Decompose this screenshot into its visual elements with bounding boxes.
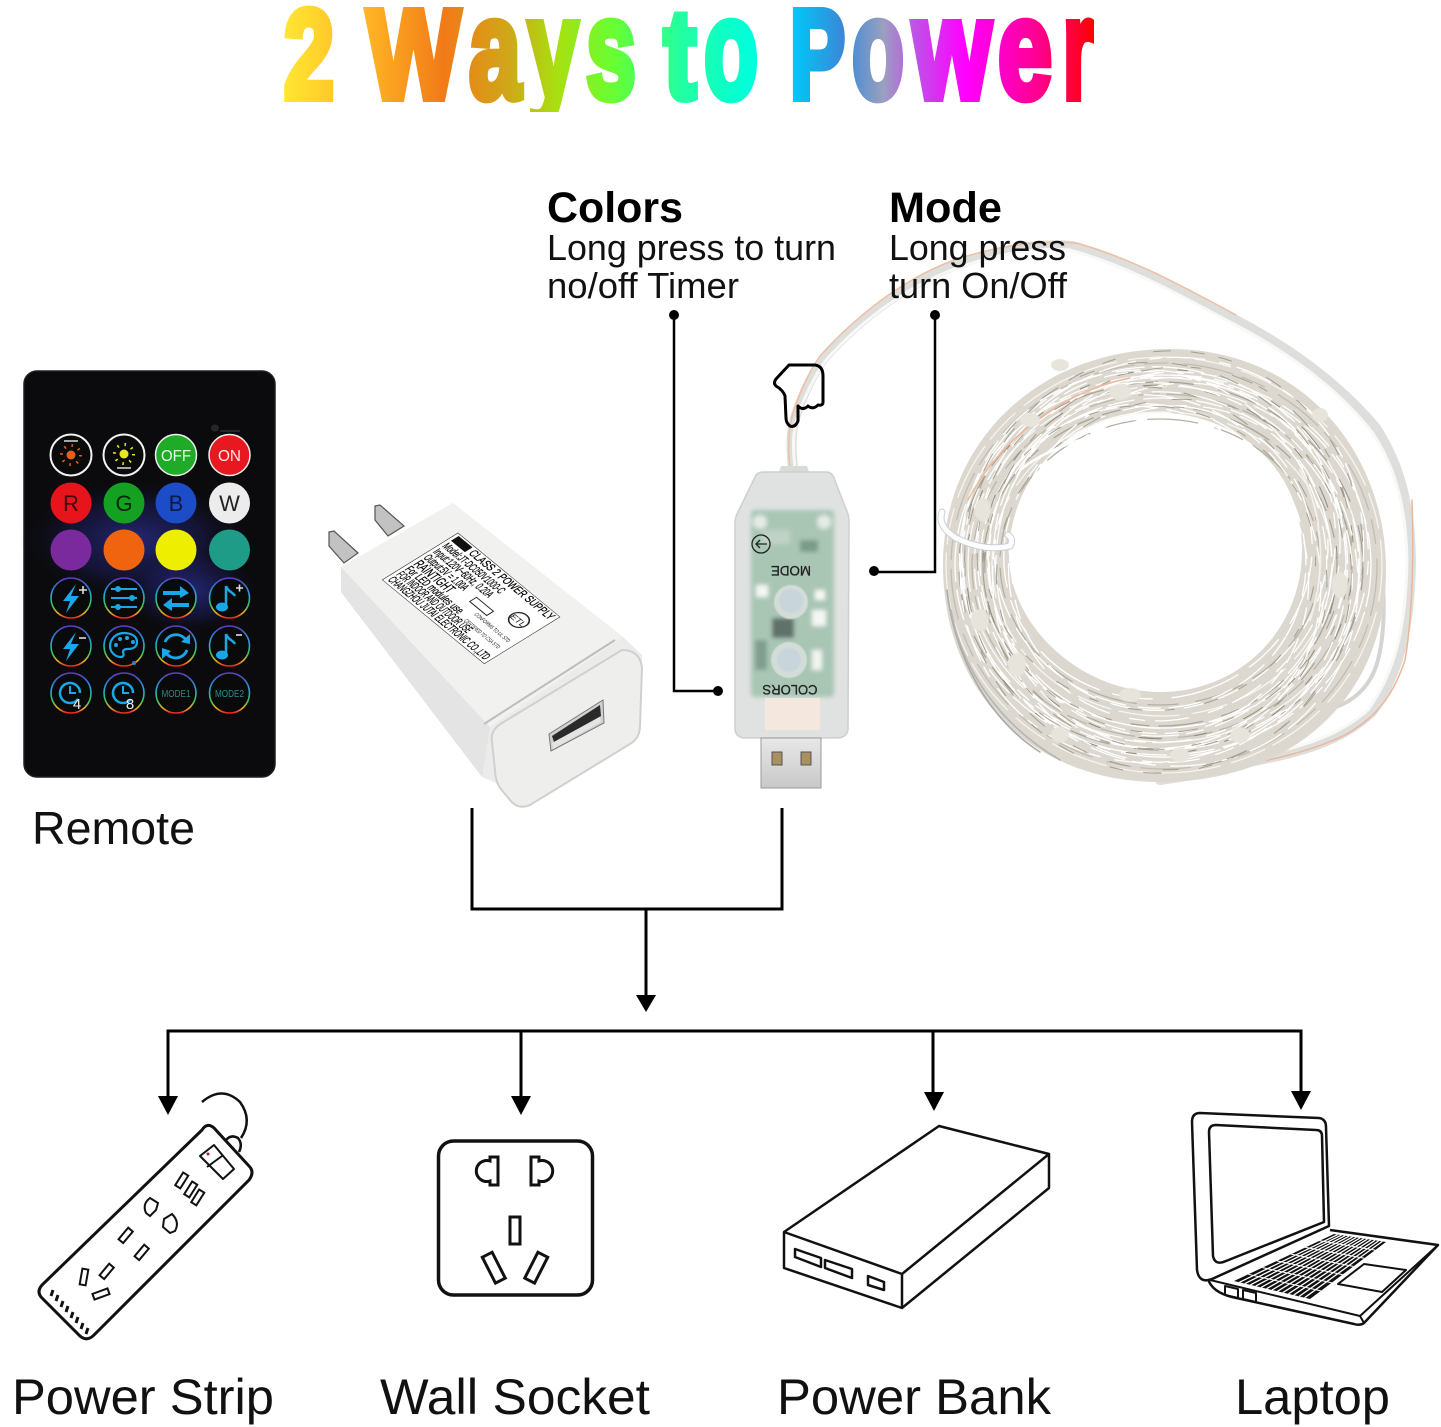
icon: laptop — [1192, 1113, 1438, 1325]
row 6 buttons: MODE1 — [162, 689, 191, 700]
title — [284, 6, 1094, 112]
adapter front face — [492, 650, 642, 807]
adapter label: CHANGZHOU JUTAI ELECTRONIC CO.,LTD — [385, 574, 494, 662]
label: wall socket: Wall Socket — [380, 1368, 650, 1425]
adapter label: Model:JT-DC050V1000-C — [439, 541, 509, 596]
row 2 buttons — [50, 482, 250, 524]
adapter label: CERTIFIED TO CSA STD — [462, 619, 501, 650]
row 1 buttons: ON — [218, 448, 241, 465]
adapter label: ETL — [508, 613, 529, 628]
adapter body — [341, 503, 642, 807]
callout: colors: Colors — [547, 185, 683, 232]
adapter label — [382, 532, 561, 664]
row 1 buttons: OFF — [161, 448, 191, 465]
USB power adapter — [329, 503, 642, 807]
label: power bank: Power Bank — [777, 1368, 1052, 1425]
adapter prongs — [329, 505, 404, 563]
USB controller: COLORS — [762, 682, 818, 698]
label: laptop: Laptop — [1235, 1368, 1390, 1425]
icon: wall socket — [438, 1141, 592, 1295]
callout: mode — [869, 185, 1068, 576]
remote label: Remote — [32, 802, 195, 854]
control buttons — [771, 585, 808, 678]
adapter label: Output:5V = 1.00A — [420, 552, 472, 593]
row 2 buttons: G — [115, 491, 133, 516]
icon: pressing hand — [774, 365, 823, 426]
adapter label: For LED modules use — [402, 564, 468, 616]
connector from adapter and USB — [472, 808, 782, 1012]
icon: power bank — [784, 1126, 1049, 1308]
row 6 buttons — [51, 673, 250, 713]
row 1 buttons — [50, 424, 250, 476]
wire loop from controller around coil — [789, 242, 1413, 780]
distribution lines and arrows — [158, 1031, 1311, 1115]
icon: power strip — [39, 1094, 252, 1339]
callout: mode: Mode — [889, 185, 1002, 232]
adapter label: CONFORMS TO UL STD — [472, 613, 511, 644]
circuit board — [751, 510, 834, 697]
adapter label: RAINTIGHT — [410, 558, 459, 595]
row 4 buttons — [51, 578, 250, 618]
adapter label: Input:120V~60Hz, 0.20A — [430, 546, 497, 600]
row 2 buttons: W — [219, 491, 240, 516]
row 6 buttons: MODE2 — [215, 689, 244, 700]
remote control — [20, 371, 275, 777]
row 5 buttons — [51, 626, 250, 666]
label: power strip: Power Strip — [12, 1368, 274, 1425]
controller neck — [779, 466, 809, 472]
row 2 buttons: B — [169, 491, 183, 516]
USB port — [549, 700, 604, 751]
row 2 buttons: R — [63, 491, 79, 516]
callout: colors: Long press to turn — [547, 227, 836, 268]
circular arrow mark — [752, 535, 770, 553]
USB controller — [735, 466, 849, 788]
row 3 colour buttons — [50, 530, 250, 570]
callout: mode: Long press — [889, 227, 1066, 268]
row 6 buttons: 8 — [126, 696, 134, 713]
keyboard — [1234, 1234, 1386, 1299]
row 6 buttons: 4 — [73, 696, 81, 713]
USB plug — [761, 698, 821, 788]
button labels: MODE — [771, 563, 811, 579]
callout: colors: no/off Timer — [547, 265, 739, 306]
light string coil — [877, 274, 1441, 848]
adapter label: CLASS 2 POWER SUPPLY — [465, 548, 558, 622]
callout: mode: turn On/Off — [889, 265, 1068, 306]
controller body — [735, 472, 849, 738]
adapter label: FOR INDOOR AND OUTDOOR USE — [393, 569, 476, 635]
callout: colors — [547, 185, 836, 696]
